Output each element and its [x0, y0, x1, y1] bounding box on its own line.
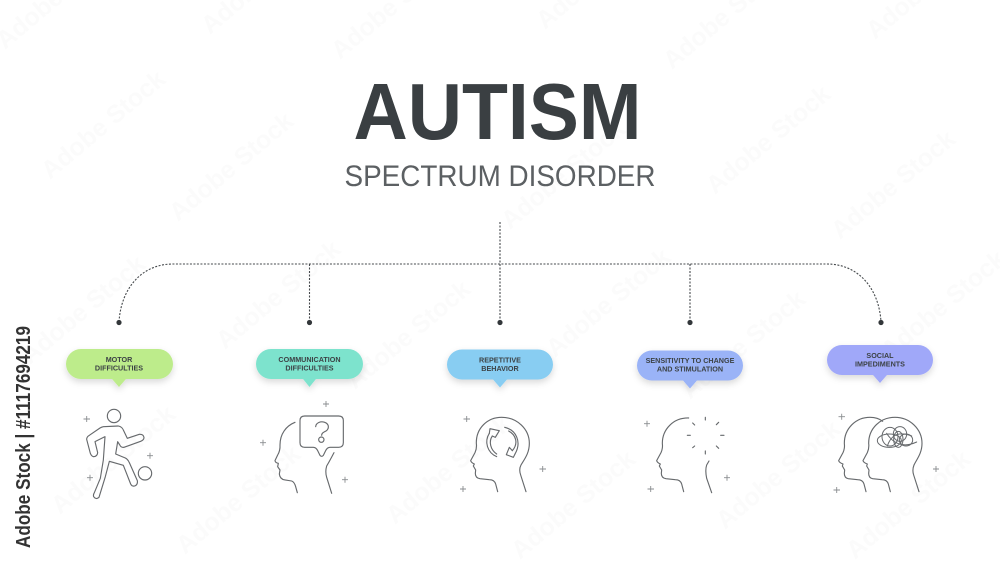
watermark pattern: Adobe Stock: [341, 275, 476, 395]
sparkles around icons: [84, 401, 939, 493]
watermark pattern: Adobe Stock: [841, 445, 976, 563]
callout: motor difficulties: DIFFICULTIES: [95, 364, 143, 372]
watermark pattern: Adobe Stock: [46, 400, 181, 520]
subtitle: SPECTRUM DISORDER: [344, 160, 656, 193]
watermark pattern: Adobe Stock: [506, 445, 641, 563]
watermark pattern: Adobe Stock: [211, 235, 346, 355]
callout: social impediments: IMPEDIMENTS: [855, 360, 905, 368]
callout: sensitivity to change and stimulation: AND STIMULATION: [657, 364, 723, 374]
callout: motor difficulties: MOTOR: [106, 355, 133, 364]
icon: head with circular arrows: [471, 417, 529, 492]
icon: running figure kicking ball: [87, 409, 152, 499]
callout: motor difficulties: [66, 349, 173, 387]
icon: two heads with tangled thoughts: [839, 417, 922, 492]
icon: head with burst of lines: [657, 417, 724, 493]
callout: communication difficulties: DIFFICULTIES: [285, 364, 334, 372]
callout: social impediments: [827, 345, 933, 383]
icon: head with question bubble: [275, 416, 343, 493]
callout: repetitive behavior: BEHAVIOR: [481, 364, 520, 373]
callout: sensitivity to change and stimulation: [637, 350, 743, 388]
watermark pattern: Adobe Stock: [541, 243, 676, 363]
watermark pattern: Adobe Stock: [381, 410, 516, 530]
watermark pattern: Adobe Stock: [16, 250, 151, 370]
watermark pattern: Adobe Stock: [496, 115, 631, 235]
callout: social impediments: SOCIAL: [866, 351, 894, 360]
watermark pattern: Adobe Stock: [826, 125, 961, 245]
callout: repetitive behavior: REPETITIVE: [479, 356, 521, 364]
dotted connector tree: [116, 222, 884, 325]
watermark pattern: Adobe Stock: [711, 415, 846, 535]
callout: repetitive behavior: [447, 350, 553, 388]
watermark pattern: Adobe Stock: [164, 107, 299, 227]
watermark pattern: Adobe Stock: [36, 65, 171, 185]
watermark pattern: Adobe Stock: [701, 80, 836, 200]
watermark pattern: Adobe Stock: [171, 440, 306, 560]
watermark pattern: Adobe Stock: [676, 285, 811, 405]
callout: communication difficulties: COMMUNICATION: [278, 355, 341, 364]
title: AUTISM: [354, 67, 642, 156]
side credit text: Adobe Stock | #1117694219: [13, 326, 35, 548]
callout: communication difficulties: [256, 349, 363, 387]
callout: sensitivity to change and stimulation: SENSITIVITY TO CHANGE: [646, 356, 735, 365]
